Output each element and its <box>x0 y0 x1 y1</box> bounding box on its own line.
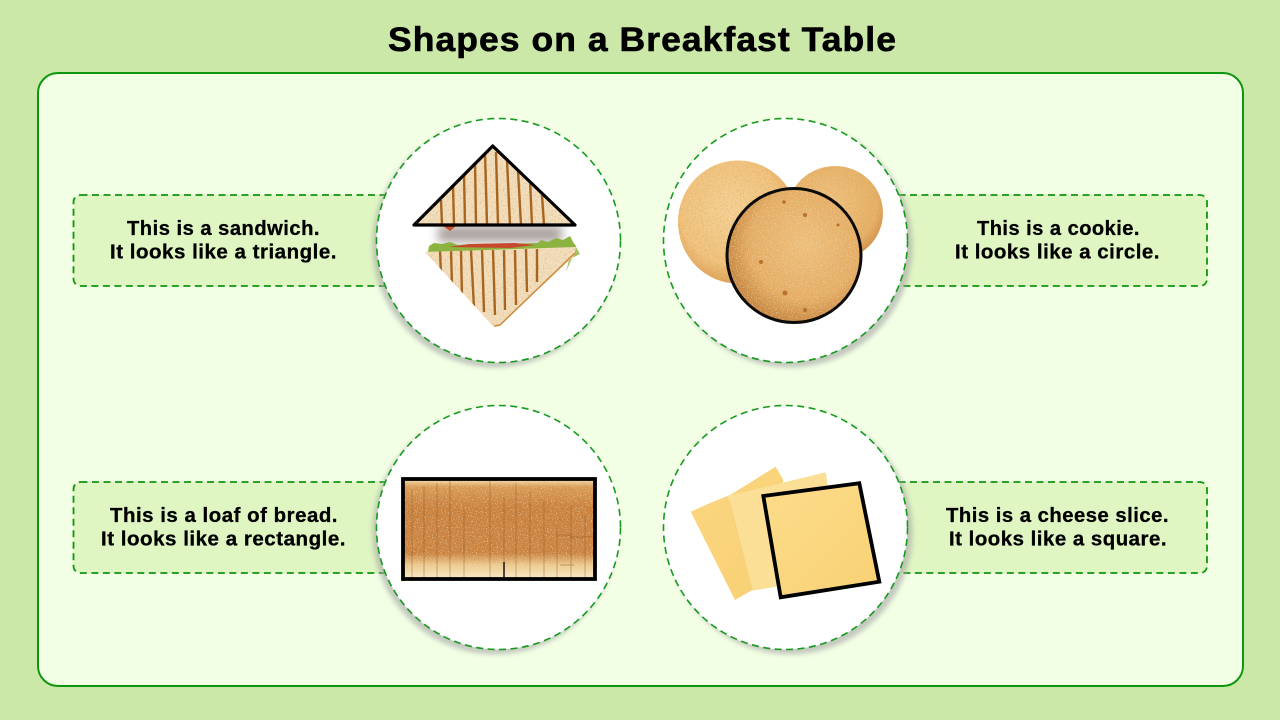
label: cookie: This is a cookie. <box>977 218 1140 240</box>
label: bread: It looks like a rectangle. <box>101 528 346 550</box>
label: bread <box>74 482 404 573</box>
label: cheese: It looks like a square. <box>949 528 1167 550</box>
icon: bread with rectangle outline <box>403 479 595 579</box>
circle: cheese <box>664 406 912 654</box>
label: sandwich: This is a sandwich. <box>127 218 320 240</box>
panel: cheese <box>664 406 1207 654</box>
panel: bread <box>74 406 620 654</box>
circle: sandwich <box>372 118 620 368</box>
panel: cookie <box>664 118 1207 368</box>
icon: sandwich with triangle outline <box>414 146 580 327</box>
label: cookie <box>880 195 1207 286</box>
label: sandwich: It looks like a triangle. <box>110 242 337 264</box>
circle: cookie <box>664 118 912 368</box>
label: cookie: It looks like a circle. <box>955 242 1160 264</box>
label: bread: This is a loaf of bread. <box>110 505 338 527</box>
label: cheese <box>880 482 1207 573</box>
title: Shapes on a Breakfast Table <box>388 21 897 59</box>
panel: sandwich <box>74 118 620 368</box>
icon: cookie with circle outline <box>678 160 883 322</box>
circle: bread <box>372 406 620 654</box>
icon: cheese slices with square outline <box>691 467 879 600</box>
label: sandwich <box>74 195 404 286</box>
label: cheese: This is a cheese slice. <box>946 505 1169 527</box>
